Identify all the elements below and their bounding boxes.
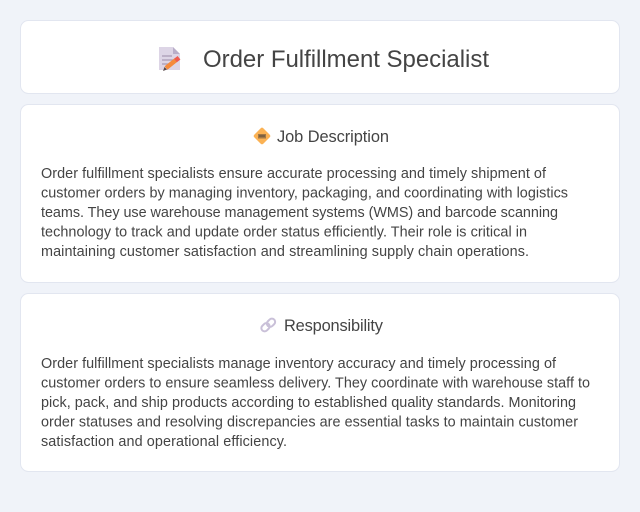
text block: job description: teams. They use warehouse management systems (WMS) and barcode scanning bbox=[41, 205, 558, 221]
title text: Order Fulfillment Specialist bbox=[203, 46, 489, 73]
text block: responsibility bbox=[41, 356, 590, 450]
text block: job description: technology to track and update order status efficiently. Their role is critical in bbox=[41, 224, 527, 240]
panel: title bbox=[20, 20, 620, 94]
text block: job description: maintaining customer satisfaction and streamlining supply chain operations. bbox=[41, 244, 529, 260]
text block: responsibility: pick, pack, and ship products according to established quality standards. Monitoring bbox=[41, 395, 576, 411]
icon: chain link bbox=[260, 317, 276, 333]
icon: diamond road sign bbox=[253, 127, 271, 145]
heading: job description: Job Description bbox=[277, 128, 389, 146]
panel: job description bbox=[20, 104, 620, 282]
text block: responsibility: order statuses and resolving discrepancies are essential tasks to maintain customer bbox=[41, 414, 578, 430]
text block: responsibility: customer orders to ensure seamless delivery. They coordinate with warehouse staff to bbox=[41, 376, 590, 392]
heading: responsibility: Responsibility bbox=[284, 317, 384, 335]
icon: document with pencil bbox=[159, 47, 180, 71]
panel: responsibility bbox=[20, 294, 620, 472]
text block: job description: Order fulfillment specialists ensure accurate processing and timely shipment of bbox=[41, 166, 547, 182]
text block: responsibility: Order fulfillment specialists manage inventory accuracy and timely processing of bbox=[41, 356, 557, 372]
text block: responsibility: satisfaction and operational efficiency. bbox=[41, 434, 287, 450]
text block: job description bbox=[41, 166, 568, 260]
text block: job description: customer orders by managing inventory, packaging, and coordinating with logistics bbox=[41, 186, 568, 202]
